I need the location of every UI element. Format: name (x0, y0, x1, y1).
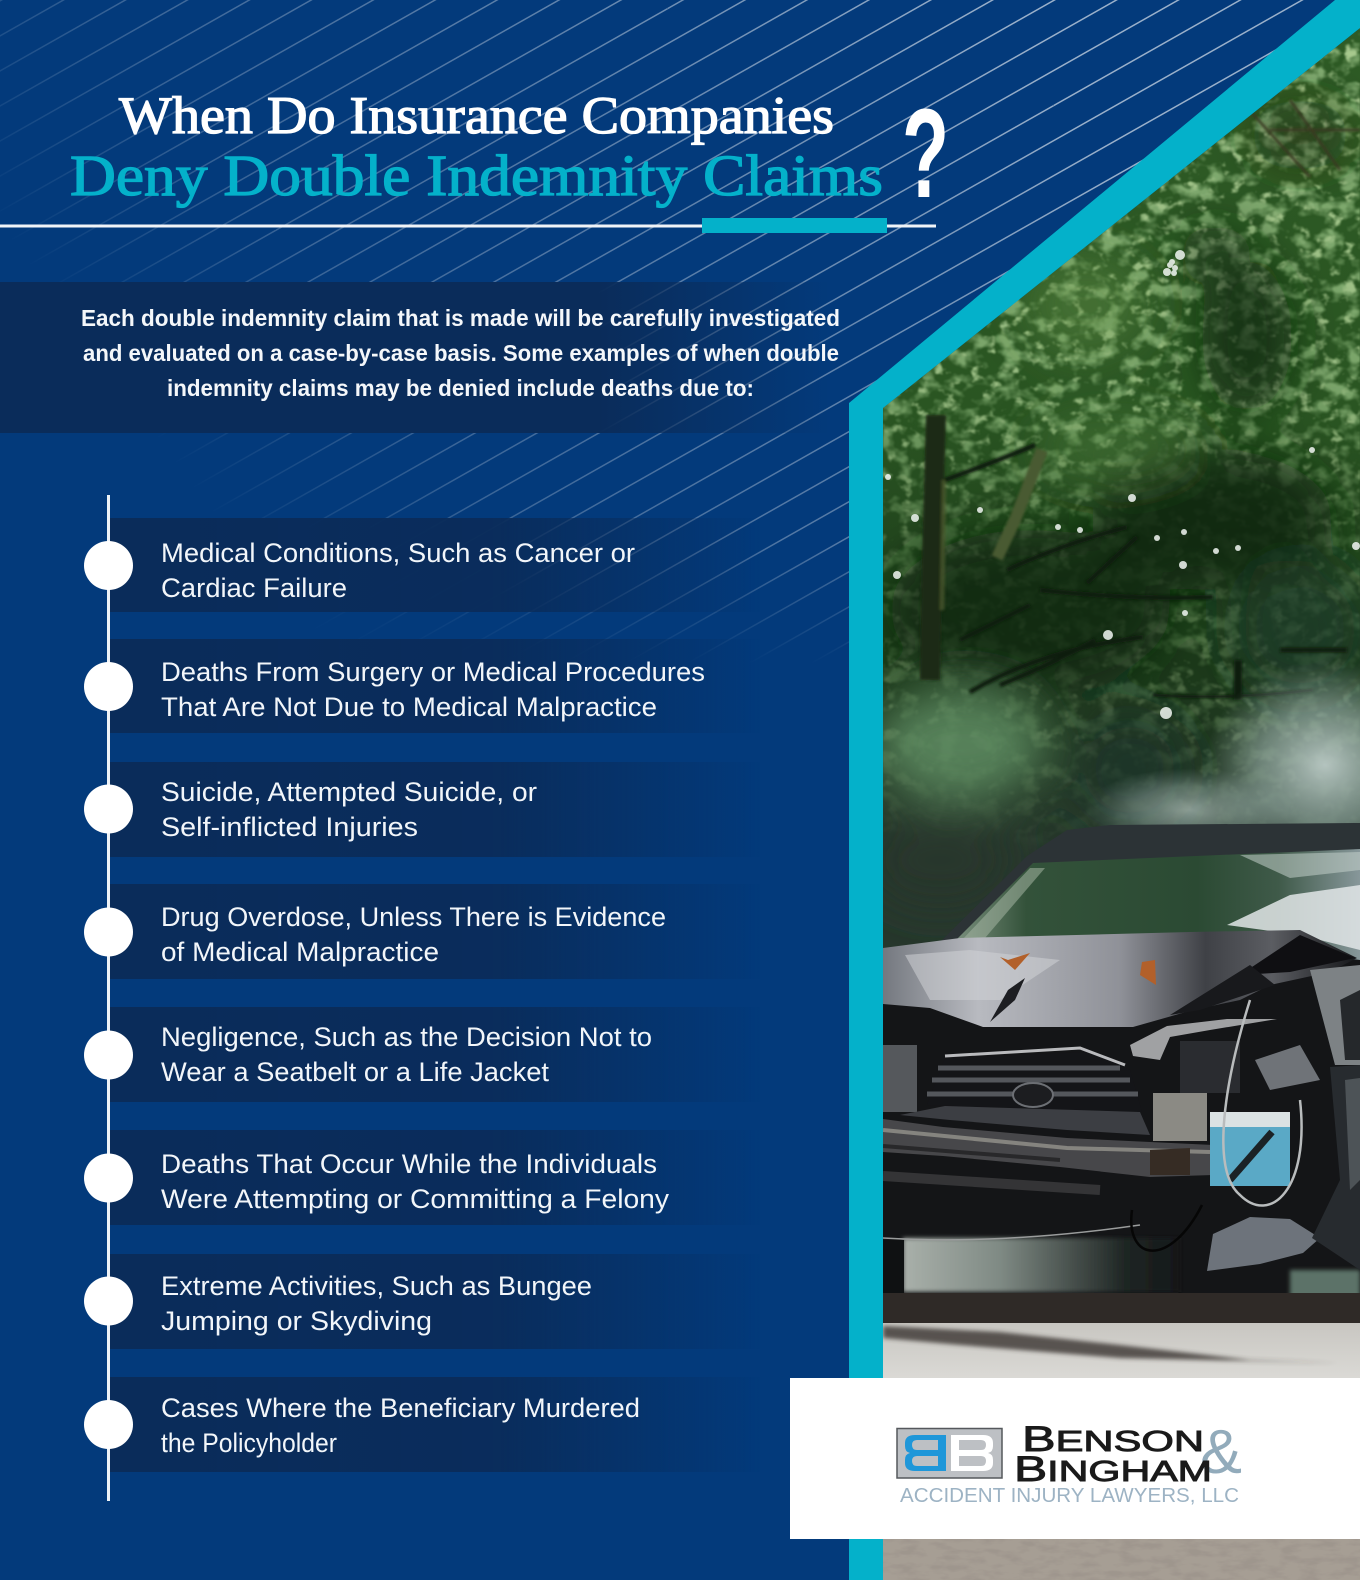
item 1: Medical Conditions, Such as Cancer or (161, 538, 635, 568)
logo panel (790, 1378, 1360, 1539)
item 1: Cardiac Failure (161, 573, 347, 603)
car roof and windshield (937, 823, 1360, 960)
intro text: Each double indemnity claim that is made will be carefully investigated (81, 305, 840, 331)
photo: crashed car (865, 0, 1360, 1580)
hoses (1131, 1000, 1302, 1251)
road (883, 1323, 1360, 1383)
tagline: ACCIDENT INJURY LAWYERS, LLC (900, 1485, 1239, 1507)
engine bay (883, 1019, 1320, 1141)
title underline (0, 218, 936, 233)
item 4: of Medical Malpractice (161, 937, 439, 967)
item 3: Suicide, Attempted Suicide, or (161, 777, 537, 807)
item 5: Wear a Seatbelt or a Life Jacket (161, 1057, 549, 1087)
fender and wheel (1310, 965, 1360, 1270)
grille (927, 1048, 1142, 1112)
item 5 (84, 1007, 760, 1102)
intro text: indemnity claims may be denied include deaths due to: (167, 375, 754, 401)
item 6 (84, 1130, 760, 1225)
item 4: Drug Overdose, Unless There is Evidence (161, 902, 666, 932)
detached panel (1207, 1217, 1320, 1271)
intro text (81, 305, 840, 401)
teal frame (849, 0, 1360, 1580)
question mark: ? (902, 83, 949, 224)
item 2 (84, 639, 760, 733)
title: When Do Insurance Companies (119, 87, 834, 145)
blue washer tank (1210, 1112, 1290, 1186)
item 8: the Policyholder (161, 1428, 337, 1458)
trunks and branches (930, 100, 1360, 700)
item 6: Deaths That Occur While the Individuals (161, 1149, 657, 1179)
panel: intro (0, 282, 840, 433)
item 2: That Are Not Due to Medical Malpractice (161, 692, 657, 722)
crumpled hood (883, 930, 1357, 1027)
list timeline (84, 495, 760, 1501)
road foreground (883, 1539, 1360, 1580)
under car (883, 960, 1360, 1300)
bumper beam (883, 1106, 1213, 1240)
item 3 (84, 762, 760, 857)
item 4 (84, 884, 760, 979)
item 7 (84, 1254, 760, 1349)
item 3: Self-inflicted Injuries (161, 812, 418, 842)
intro text: and evaluated on a case-by-case basis. Some examples of when double (83, 340, 839, 366)
wet ground (883, 1293, 1360, 1323)
firm name: B INGHAM (1014, 1450, 1212, 1489)
foliage light and dark masses (883, 76, 1360, 831)
item 1 (84, 518, 760, 612)
light specks (885, 250, 1360, 719)
item 8 (84, 1377, 760, 1472)
firm name (1014, 1420, 1212, 1489)
mist (1092, 666, 1360, 826)
item 7: Jumping or Skydiving (161, 1306, 432, 1336)
item 5: Negligence, Such as the Decision Not to (161, 1022, 652, 1052)
item 2: Deaths From Surgery or Medical Procedures (161, 657, 705, 687)
background stripes (0, 0, 1324, 650)
item 7: Extreme Activities, Such as Bungee (161, 1271, 592, 1301)
title: Deny Double Indemnity Claims (70, 143, 883, 208)
logo mark (897, 1428, 1002, 1478)
item 8: Cases Where the Beneficiary Murdered (161, 1393, 640, 1423)
firm name: B ENSON (1022, 1420, 1204, 1459)
ampersand: & (1200, 1418, 1242, 1487)
title (70, 87, 883, 208)
item 6: Were Attempting or Committing a Felony (161, 1184, 670, 1214)
